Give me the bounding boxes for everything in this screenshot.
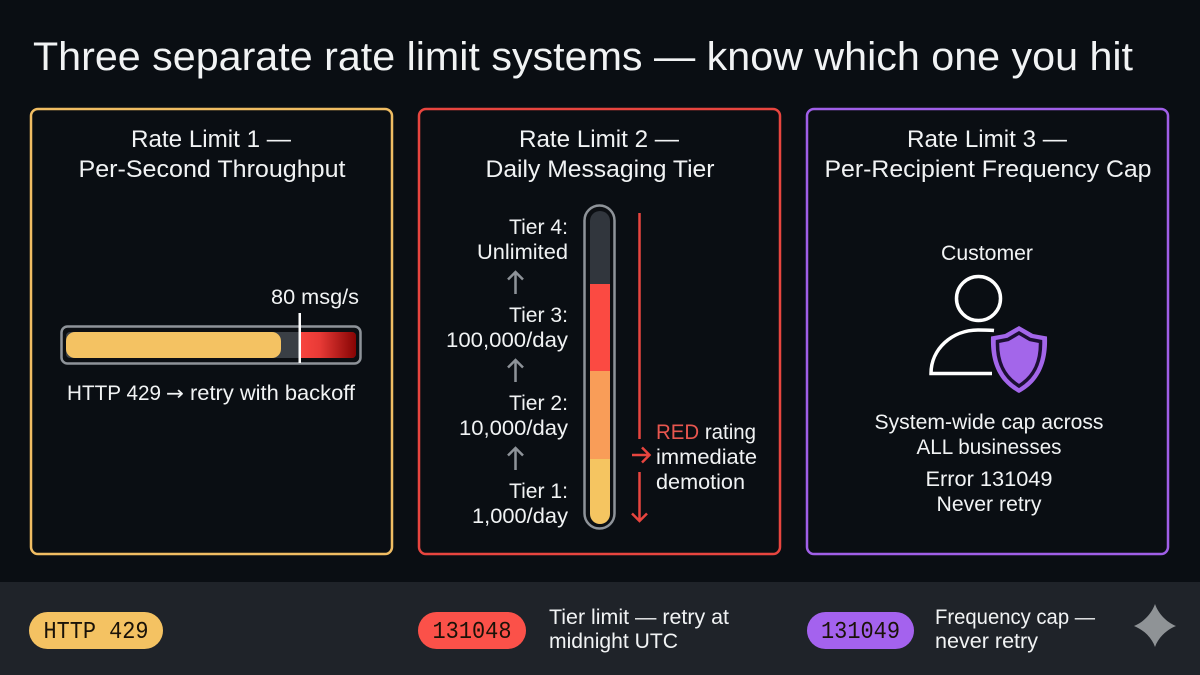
tier labels: 100,000/day	[446, 329, 569, 352]
system-wide cap note	[874, 411, 1104, 516]
tier up arrows	[508, 272, 523, 470]
legend text: frequency cap	[935, 606, 1095, 653]
demotion note: demotion	[656, 471, 745, 494]
panel 2 heading: Rate Limit 2 —	[519, 126, 679, 153]
demotion note: immediate	[656, 446, 757, 469]
panel 1 heading	[78, 126, 346, 183]
tier labels: 1,000/day	[472, 505, 569, 528]
badge: 131049: 131049	[821, 619, 900, 646]
throughput caption: retry with backoff	[190, 382, 355, 405]
legend text: tier limit: midnight UTC	[549, 630, 678, 653]
icon: sparkle	[1134, 604, 1176, 647]
panel 3 heading: Rate Limit 3 —	[907, 126, 1067, 153]
badge: HTTP 429	[29, 612, 163, 649]
panel: rate limit 3	[807, 109, 1168, 554]
footer legend bar	[0, 582, 1200, 675]
tier labels: Unlimited	[477, 241, 568, 264]
title: Three separate rate limit systems — know which one you hit	[33, 35, 1133, 79]
badge: 131048	[418, 612, 526, 649]
tier tube gauge	[584, 206, 614, 528]
tier labels: Tier 3:	[509, 304, 568, 327]
tier labels: Tier 2:	[509, 392, 568, 415]
panel 2 heading	[486, 126, 715, 183]
panel 2 heading: Daily Messaging Tier	[486, 156, 715, 183]
demotion note: RED rating	[656, 421, 756, 444]
legend text: frequency cap: never retry	[935, 630, 1039, 653]
system-wide cap note: ALL businesses	[916, 436, 1062, 459]
panel 3 heading: Per-Recipient Frequency Cap	[824, 156, 1152, 183]
panel 1 heading: Per-Second Throughput	[78, 156, 346, 183]
legend text: frequency cap: Frequency cap —	[935, 606, 1095, 629]
panel: rate limit 2	[419, 109, 780, 554]
badge: 131049	[807, 612, 914, 649]
panel 1 heading: Rate Limit 1 —	[131, 126, 291, 153]
tier labels	[446, 216, 569, 528]
throughput caption: HTTP 429	[67, 382, 161, 405]
tier labels: Tier 1:	[509, 480, 568, 503]
demotion arrow	[632, 213, 650, 521]
panel: rate limit 1	[31, 109, 392, 554]
throughput caption	[67, 381, 355, 405]
system-wide cap note: Error 131049	[926, 468, 1052, 491]
icon: customer with shield	[931, 276, 1047, 393]
customer label: Customer	[941, 242, 1033, 265]
legend text: tier limit	[549, 606, 729, 653]
throughput bar	[62, 313, 360, 364]
tier labels: Tier 4:	[509, 216, 568, 239]
demotion note	[656, 421, 757, 494]
throughput limit label: 80 msg/s	[271, 286, 359, 309]
system-wide cap note: Never retry	[936, 493, 1042, 516]
system-wide cap note: System-wide cap across	[874, 411, 1104, 434]
legend text: tier limit: Tier limit — retry at	[549, 606, 729, 629]
badge: 131048: 131048	[432, 619, 512, 646]
throughput caption: →	[166, 381, 184, 405]
badge: HTTP 429: HTTP 429	[44, 619, 148, 646]
panel 3 heading	[824, 126, 1152, 183]
tier labels: 10,000/day	[459, 417, 569, 440]
